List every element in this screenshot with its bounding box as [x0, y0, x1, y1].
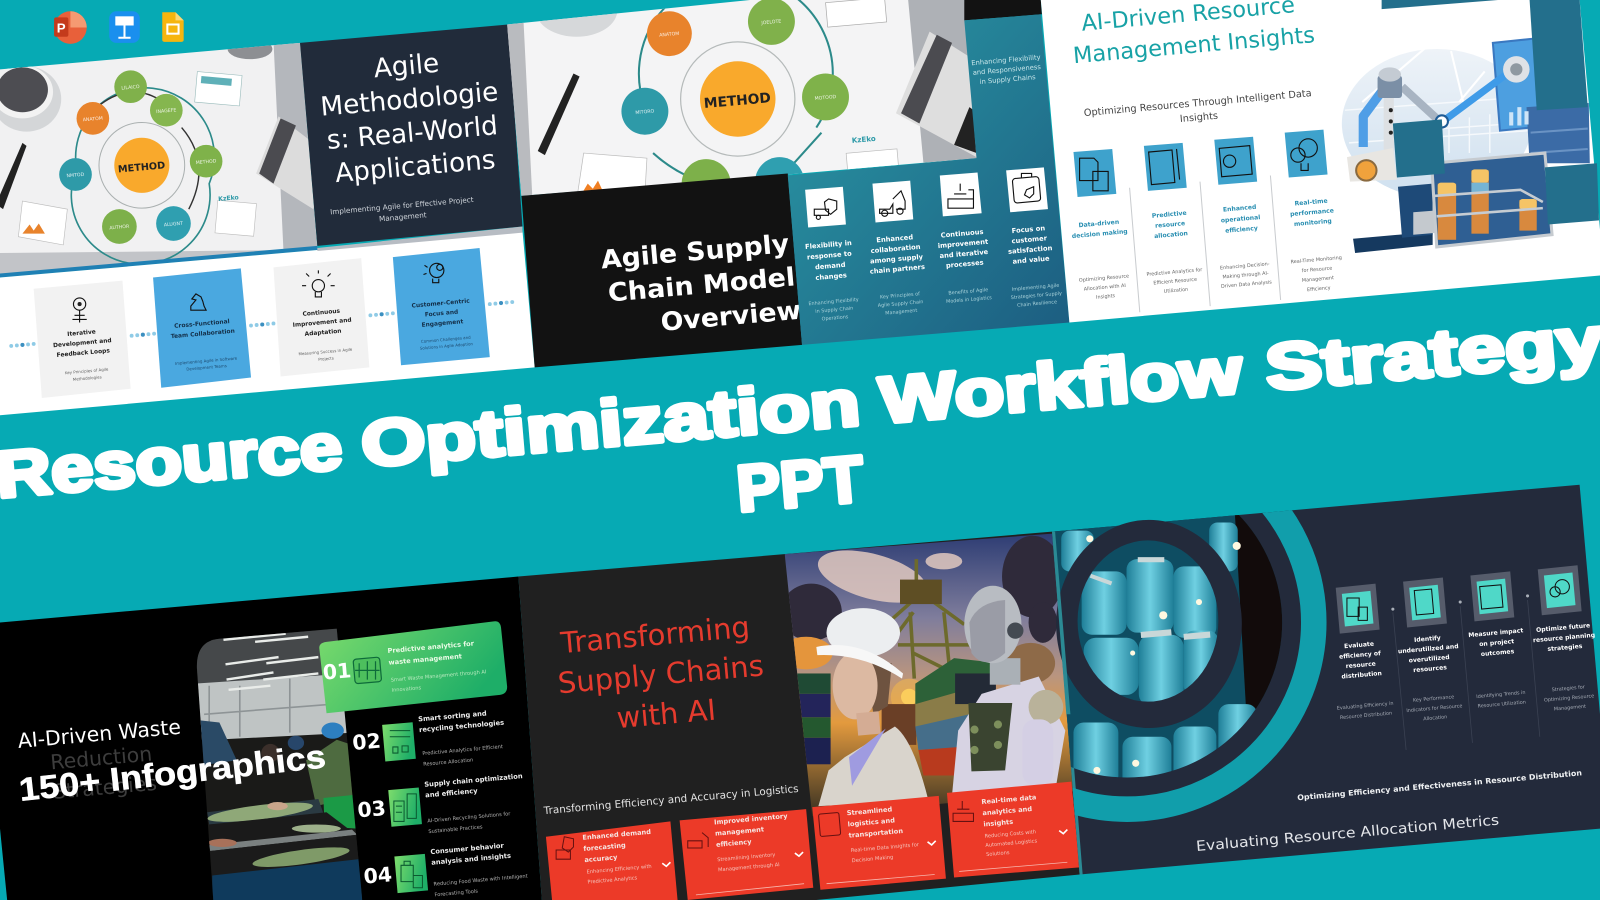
- column: evaluate efficiency: [1336, 584, 1395, 721]
- card: 01 predictive analytics: Smart Waste Management through AI: [390, 669, 487, 684]
- photo: method diagram on desk: METHOD: [118, 160, 166, 175]
- row: 03 supply chain: and efficiency: [425, 787, 479, 799]
- card: continuous improvement: [273, 258, 369, 377]
- card: 01 predictive analytics: Innovations: [391, 685, 422, 694]
- column: customer focus: satisfaction: [1008, 244, 1053, 256]
- column: data-driven: Insights: [1096, 293, 1116, 301]
- column: real-time monitoring: monitoring: [1294, 218, 1332, 228]
- heading continuation: Strategies: [52, 771, 158, 804]
- card: customer-centric focus: Focus and: [425, 310, 459, 319]
- column: operational efficiency: operational: [1221, 214, 1261, 224]
- card: customer-centric focus: Common Challenges and: [421, 335, 471, 344]
- column: collaboration: collaboration: [870, 243, 921, 255]
- card: cross-functional collaboration: Team Collaboration: [171, 329, 235, 340]
- card: streamlined logistics: logistics and: [847, 816, 895, 828]
- row: 03 supply chain: Supply chain optimization: [424, 772, 523, 789]
- column: continuous improvement: Continuous: [940, 228, 984, 240]
- panel: title block: [300, 24, 522, 246]
- photo: method diagram enlarged: MITORO: [635, 108, 655, 116]
- column: identify utilization: Key Performance: [1413, 694, 1454, 704]
- column: evaluate efficiency: efficiency of: [1339, 650, 1381, 661]
- title line 1: Strategy: [1262, 303, 1600, 404]
- column: optimize future: Management: [1554, 704, 1586, 713]
- card: 01 predictive analytics: [319, 621, 507, 713]
- column: flexibility: in Supply Chain: [815, 306, 854, 315]
- supporting statement: Optimizing Efficiency and Effectiveness in Resource Distribution: [1297, 768, 1582, 802]
- column: collaboration: [867, 181, 925, 317]
- column: collaboration: Agile Supply Chain: [878, 299, 924, 309]
- column: predictive: [1144, 143, 1204, 296]
- card: iterative development: Development and: [53, 338, 112, 349]
- column: customer focus: Chain Resilience: [1017, 299, 1057, 309]
- intro text: in Supply Chains: [979, 73, 1036, 86]
- column: optimize future: strategies: [1547, 643, 1583, 653]
- title line 1: Optimization: [358, 366, 863, 481]
- heading: Overview: [659, 296, 802, 338]
- card: improved inventory: management: [715, 825, 765, 838]
- column: operational efficiency: Driven Data Analysis: [1221, 279, 1272, 290]
- column: predictive: allocation: [1154, 230, 1188, 240]
- row: 04 consumer behavior: Consumer behavior: [430, 842, 505, 856]
- row: 02 smart sorting: recycling technologies: [419, 719, 504, 734]
- row: 03 supply chain: Sustainable Practices: [428, 824, 483, 835]
- card: streamlined logistics: Streamlined: [846, 805, 893, 817]
- column: real-time monitoring: performance: [1290, 207, 1334, 218]
- dividers: [1130, 176, 1281, 312]
- intro text: and Responsiveness: [972, 63, 1042, 77]
- row: 03 supply chain: 03: [357, 796, 387, 822]
- heading continuation: Reduction: [49, 742, 153, 774]
- column: predictive: Utilization: [1164, 287, 1188, 295]
- panel: evaluating resource allocation slide: [1052, 484, 1600, 874]
- column: real-time monitoring: [1285, 130, 1345, 294]
- card: enhanced demand forecasting: forecasting: [583, 841, 626, 853]
- title line 2: PPT: [734, 442, 867, 525]
- column: real-time monitoring: Management: [1302, 275, 1334, 284]
- row: 04 consumer behavior: Reducing Food Waste with Intelligent: [433, 874, 528, 888]
- card: customer-centric focus: Engagement: [421, 319, 464, 329]
- column: measure impact: outcomes: [1481, 648, 1515, 658]
- title line 1: [0, 303, 1600, 511]
- card: iterative development: Key Principles of Agile: [65, 367, 109, 375]
- teal ring: [1072, 510, 1326, 822]
- column: predictive: Efficient Resource: [1153, 277, 1197, 287]
- column: evaluate efficiency: Resource Distribution: [1340, 711, 1392, 721]
- heading: Management Insights: [1072, 22, 1316, 69]
- card: cross-functional collaboration: Cross-Functional: [174, 319, 230, 330]
- card: continuous improvement: Adaptation: [304, 329, 342, 338]
- divider strip: [0, 246, 317, 278]
- row: 04 consumer behavior: Forecasting Tools: [434, 889, 479, 898]
- column: flexibility: response to: [807, 250, 852, 261]
- slide background: [518, 532, 1080, 900]
- slide background: [1052, 485, 1600, 874]
- column: identify utilization: resources: [1413, 664, 1448, 674]
- photo: method diagram on desk: [0, 42, 318, 274]
- column: collaboration: Management: [885, 308, 918, 317]
- column: flexibility: demand: [815, 261, 846, 271]
- column: predictive: resource: [1155, 220, 1185, 230]
- card: streamlined logistics: transportation: [848, 827, 904, 840]
- card: iterative development: Feedback Loops: [56, 348, 111, 359]
- column: predictive: Predictive: [1152, 210, 1187, 220]
- column: continuous improvement: Models in Logistics: [946, 295, 993, 305]
- column: optimize future: Optimizing Resource: [1544, 693, 1594, 704]
- column: measure impact: Resource Utilization: [1477, 699, 1526, 710]
- card: 01 predictive analytics: Predictive analytics for: [387, 639, 475, 655]
- photo: method diagram enlarged: ANATOM: [659, 31, 680, 39]
- slide title: Evaluating Resource Allocation Metrics: [1195, 813, 1500, 855]
- subtitle: Transforming Efficiency and Accuracy in Logistics: [542, 783, 799, 817]
- photo: engineer and robot at port: [780, 531, 1082, 821]
- column: real-time monitoring: Real-time: [1294, 198, 1328, 208]
- icon: PowerPoint: P: [57, 21, 66, 36]
- heading: Agile: [373, 49, 440, 84]
- title line 1: Workflow: [877, 333, 1245, 437]
- column: real-time monitoring: for Resource: [1302, 266, 1333, 274]
- column: optimize future: Strategies for: [1552, 684, 1585, 693]
- panel: four agile cards: [0, 227, 535, 415]
- column: optimize future: resource planning: [1533, 632, 1595, 644]
- column: customer focus: Strategies for Supply: [1011, 291, 1062, 301]
- card: enhanced demand forecasting: Enhancing Efficiency with: [586, 864, 652, 875]
- panel: agile supply chain slide: [500, 0, 1069, 367]
- row: 04 consumer behavior: analysis and insights: [431, 852, 511, 867]
- row: 03 supply chain: [357, 772, 524, 835]
- column: real-time monitoring: Real-Time Monitoring: [1290, 255, 1342, 265]
- card: real-time analytics: [947, 782, 1080, 878]
- title line 1: Resource: [0, 409, 345, 511]
- column: customer focus: customer: [1011, 234, 1048, 245]
- column: flexibility: [805, 187, 860, 324]
- card: cross-functional collaboration: Implementing Agile in Software: [175, 355, 238, 366]
- column: data-driven: decision making: [1072, 228, 1128, 240]
- photo: recycling plant: [194, 622, 372, 900]
- panel: teal benefits: [788, 14, 1069, 345]
- card: 01 predictive analytics: 01: [322, 658, 352, 685]
- photo: method diagram enlarged: METHOD: [703, 90, 772, 112]
- subtitle: Insights: [1179, 111, 1219, 125]
- column: continuous improvement: [937, 172, 993, 305]
- row: 02 smart sorting: Predictive Analytics for Efficient: [422, 744, 503, 757]
- column: optimize future: Optimize future: [1536, 622, 1590, 634]
- column: customer focus: and value: [1012, 254, 1050, 266]
- column: predictive: Predictive Analytics for: [1146, 267, 1203, 278]
- column: operational efficiency: Making through AI-: [1222, 270, 1269, 281]
- photo: method diagram on desk: KzEko: [218, 194, 239, 203]
- column: evaluate efficiency: Evaluate: [1344, 641, 1374, 650]
- card: real-time analytics: Real-time data: [981, 793, 1037, 806]
- card: improved inventory: Streamlining Inventory: [717, 852, 776, 863]
- column: continuous improvement: and iterative: [939, 248, 989, 260]
- card: enhanced demand forecasting: Predictive Analytics: [587, 875, 638, 886]
- column: collaboration: Enhanced: [876, 233, 914, 244]
- photo: glass jars: [1052, 515, 1282, 778]
- column: continuous improvement: processes: [946, 259, 984, 270]
- heading: Applications: [334, 145, 497, 189]
- subtitle: Optimizing Resources Through Intelligent Data: [1083, 88, 1312, 119]
- card: improved inventory: [680, 809, 813, 900]
- photo: method diagram on desk: LILAICO: [121, 84, 140, 92]
- photo: method diagram enlarged: KzEko: [851, 134, 876, 145]
- column: collaboration: among supply: [870, 253, 924, 265]
- photo: method diagram enlarged: MOTOOD: [814, 94, 837, 102]
- connector dots: [9, 300, 514, 348]
- column: flexibility: Operations: [821, 314, 849, 322]
- card: iterative development: Methodologies: [73, 374, 102, 382]
- callout: 150+ Infographics: 150+ Infographics: [17, 737, 327, 808]
- panel: software icons: [54, 11, 184, 44]
- photo: method diagram on desk: ALUGNT: [164, 221, 183, 228]
- column: operational efficiency: efficiency: [1225, 225, 1258, 235]
- card: cross-functional collaboration: [153, 268, 251, 388]
- card: enhanced demand forecasting: Enhanced demand: [582, 828, 652, 842]
- column: operational efficiency: [1214, 137, 1272, 290]
- heading: Agile Supply: [600, 229, 791, 275]
- column: measure impact: Identifying Trends in: [1476, 690, 1526, 700]
- photo: method diagram on desk: NMTOD: [66, 172, 85, 179]
- card: 01 predictive analytics: waste management: [388, 652, 463, 667]
- title: [0, 303, 1600, 525]
- photo: method diagram on desk: AUTHOR: [109, 224, 130, 231]
- column: evaluate efficiency: resource: [1345, 661, 1376, 670]
- column: customer focus: Focus on: [1011, 224, 1046, 235]
- black top corner: [964, 0, 1042, 20]
- row: 02 smart sorting: Smart sorting and: [418, 709, 487, 723]
- photo: method diagram enlarged: JOELOTE: [760, 19, 782, 26]
- card: improved inventory: Management through AI: [718, 862, 780, 873]
- column: continuous improvement: improvement: [937, 238, 989, 250]
- column: identify utilization: Identify: [1414, 635, 1441, 644]
- panel: transforming supply chains slide: [518, 531, 1082, 900]
- card: continuous improvement: Continuous: [302, 309, 341, 318]
- column: customer focus: Implementing Agile: [1012, 283, 1060, 293]
- card: continuous improvement: Improvement and: [293, 318, 352, 329]
- icon: Keynote: [109, 11, 140, 43]
- row: 02 smart sorting: Resource Allocation: [423, 757, 473, 768]
- column: collaboration: chain partners: [870, 263, 925, 276]
- photo: method diagram enlarged: [500, 0, 990, 208]
- row: 02 smart sorting: 02: [351, 729, 382, 755]
- heading: Supply Chains: [556, 648, 765, 700]
- photo: method diagram on desk: METHOD: [195, 158, 217, 166]
- subtitle: Management: [379, 210, 427, 223]
- column: measure impact: on project: [1479, 638, 1514, 648]
- row: 04 consumer behavior: [363, 841, 529, 898]
- column: customer focus: [1006, 167, 1063, 309]
- column: identify utilization: underutilized and: [1398, 643, 1459, 655]
- illustration: robot arm and lab: [1342, 39, 1590, 253]
- card: streamlined logistics: Decision Making: [852, 855, 894, 864]
- column: evaluate efficiency: distribution: [1341, 670, 1382, 681]
- row: 02 smart sorting: [351, 708, 504, 768]
- panel: headline block: [521, 173, 802, 367]
- card: customer-centric focus: [393, 248, 490, 365]
- card: real-time analytics: insights: [983, 818, 1013, 828]
- heading: Chain Model: [607, 262, 796, 309]
- column: data-driven: Data-driven: [1078, 219, 1119, 229]
- column: data-driven: [1071, 149, 1131, 302]
- card: customer-centric focus: Solutions in Agile Adoption: [420, 341, 474, 351]
- card: customer-centric focus: Customer-Centric: [411, 299, 471, 310]
- subtitle: Implementing Agile for Effective Project: [330, 195, 474, 216]
- column: operational efficiency: Enhanced: [1223, 204, 1257, 214]
- column: data-driven: Allocation with AI: [1083, 283, 1126, 293]
- column: flexibility: Flexibility in: [805, 239, 852, 251]
- column: collaboration: Key Principles of: [880, 291, 920, 301]
- card: continuous improvement: Projects: [318, 356, 334, 362]
- column: identify utilization: [1397, 578, 1464, 724]
- column: evaluate efficiency: Evaluating Efficiency in: [1337, 701, 1394, 712]
- column: identify utilization: overutilized: [1408, 654, 1450, 665]
- heading: AI-Driven Waste: [17, 715, 182, 753]
- card: real-time analytics: Reducing Costs with: [984, 829, 1036, 840]
- row: 04 consumer behavior: 04: [363, 862, 393, 889]
- column: operational efficiency: Enhancing Decision-: [1220, 261, 1270, 272]
- column: data-driven: Optimizing Resource: [1079, 273, 1129, 284]
- card: enhanced demand forecasting: [546, 821, 678, 900]
- photo: method diagram on desk: INAGEFE: [156, 107, 177, 115]
- heading: with AI: [615, 693, 717, 735]
- column: flexibility: Enhancing Flexibility: [808, 297, 859, 307]
- card: cross-functional collaboration: Development Teams: [186, 363, 227, 372]
- column: measure impact: [1468, 571, 1527, 710]
- card: real-time analytics: Automated Logistics: [985, 838, 1038, 849]
- separators: [1391, 594, 1540, 750]
- panel: AI-driven waste slide: [0, 577, 542, 900]
- inner dark ring: [1056, 520, 1242, 728]
- panel: AI-driven resource management slide: [1041, 0, 1600, 322]
- slide background: [0, 577, 542, 900]
- card: iterative development: [34, 281, 131, 398]
- column: continuous improvement: Benefits of Agile: [948, 287, 988, 297]
- card: streamlined logistics: [812, 796, 946, 890]
- card: real-time analytics: Solutions: [986, 850, 1010, 858]
- column: measure impact: Measure impact: [1468, 627, 1524, 639]
- card: iterative development: Iterative: [67, 329, 96, 338]
- card: improved inventory: Improved inventory: [714, 812, 788, 826]
- card: continuous improvement: Measuring Success in Agile: [298, 347, 353, 356]
- card: real-time analytics: analytics and: [982, 805, 1033, 817]
- heading: Transforming: [558, 610, 751, 660]
- teal placeholder blocks: [1382, 0, 1599, 224]
- column: flexibility: changes: [815, 271, 847, 282]
- heading: Methodologie: [319, 77, 500, 123]
- column: identify utilization: Allocation: [1423, 714, 1448, 722]
- card: improved inventory: efficiency: [716, 838, 752, 849]
- column: identify utilization: Indicators for Resource: [1406, 703, 1463, 714]
- intro text: Enhancing Flexibility: [971, 53, 1041, 67]
- heading: s: Real-World: [326, 111, 499, 156]
- panel: agile methodologies slide: [0, 24, 535, 415]
- photo: method diagram on desk: ANATOM: [82, 116, 103, 123]
- card: streamlined logistics: Real-time Data Insights for: [851, 842, 920, 854]
- card: enhanced demand forecasting: accuracy: [584, 853, 618, 864]
- column: optimize future: [1532, 565, 1596, 713]
- icon: Google Slides: [162, 12, 184, 42]
- slide background: [1041, 0, 1600, 322]
- slide edge: [1052, 532, 1070, 714]
- ring graphic: [1052, 510, 1326, 822]
- column: real-time monitoring: Efficiency: [1307, 285, 1331, 293]
- row: 03 supply chain: AI-Driven Recycling Solutions for: [427, 811, 512, 824]
